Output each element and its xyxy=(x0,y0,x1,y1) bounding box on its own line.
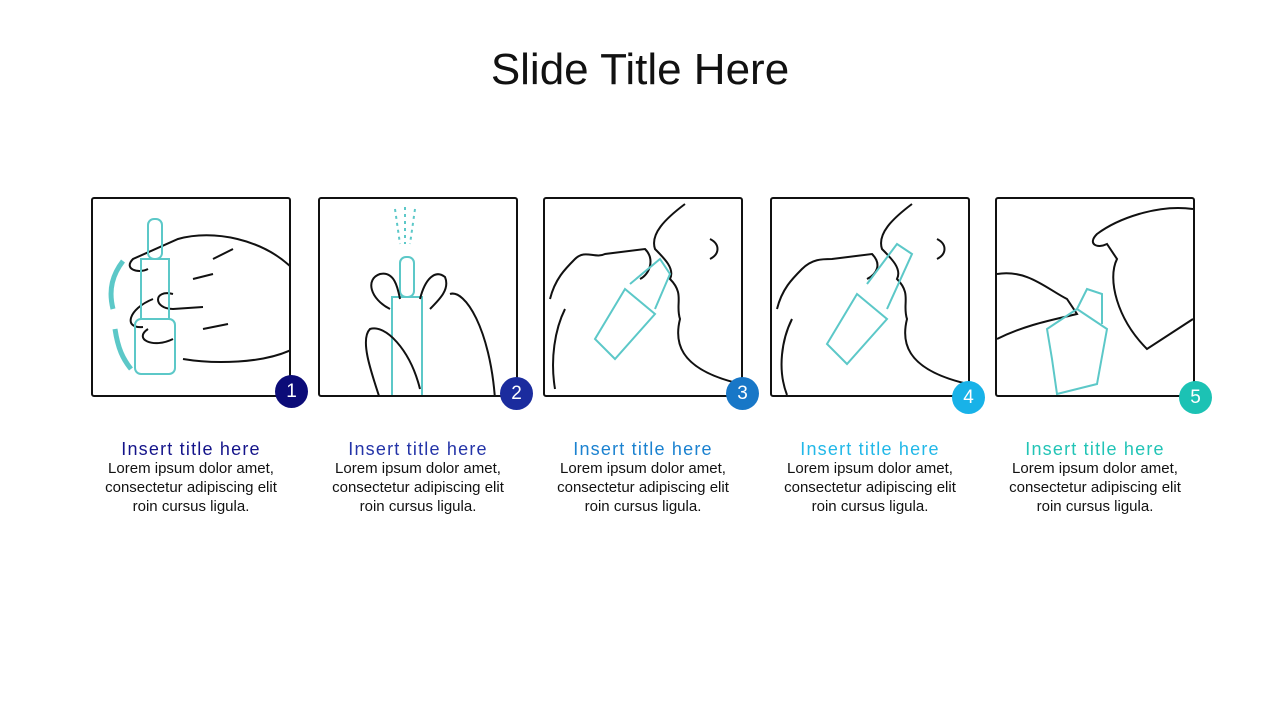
text 3: Lorem ipsum dolor amet, xyxy=(560,460,726,477)
text 1: Insert title here xyxy=(121,439,261,459)
text 2: roin cursus ligula. xyxy=(360,498,476,515)
panel: step 2 xyxy=(318,197,533,515)
text 4: roin cursus ligula. xyxy=(812,498,928,515)
text 3: Insert title here xyxy=(573,439,713,459)
text 1: consectetur adipiscing elit xyxy=(105,479,277,496)
text 5: Lorem ipsum dolor amet, xyxy=(1012,460,1178,477)
text 3 xyxy=(557,439,729,515)
illustration 4 xyxy=(770,197,970,397)
badge 2 xyxy=(500,377,533,410)
text 3: consectetur adipiscing elit xyxy=(557,479,729,496)
text 2: Insert title here xyxy=(348,439,488,459)
badge 4 xyxy=(952,381,985,414)
title: Slide Title Here xyxy=(491,45,789,94)
badge 2: 2 xyxy=(511,383,522,404)
badge 5: 5 xyxy=(1190,387,1201,408)
panel: step 3 xyxy=(543,197,759,515)
text 5: roin cursus ligula. xyxy=(1037,498,1153,515)
panel: step 4 xyxy=(770,197,985,515)
badge 1 xyxy=(275,375,308,408)
panel: step 1 xyxy=(91,197,308,515)
text 4: Lorem ipsum dolor amet, xyxy=(787,460,953,477)
illustration 2 xyxy=(318,197,518,397)
text 5: consectetur adipiscing elit xyxy=(1009,479,1181,496)
text 1: roin cursus ligula. xyxy=(133,498,249,515)
text 2: consectetur adipiscing elit xyxy=(332,479,504,496)
text 3: roin cursus ligula. xyxy=(585,498,701,515)
badge 5 xyxy=(1179,381,1212,414)
text 2: Lorem ipsum dolor amet, xyxy=(335,460,501,477)
illustration 5 xyxy=(995,197,1195,397)
badge 3: 3 xyxy=(737,383,748,404)
text 4 xyxy=(784,439,956,515)
text 1: Lorem ipsum dolor amet, xyxy=(108,460,274,477)
illustration 1 xyxy=(91,197,291,397)
badge 1: 1 xyxy=(286,381,297,402)
text 4: consectetur adipiscing elit xyxy=(784,479,956,496)
badge 4: 4 xyxy=(963,387,974,408)
badge 3 xyxy=(726,377,759,410)
text 5 xyxy=(1009,439,1181,515)
text 2 xyxy=(332,439,504,515)
panel: step 5 xyxy=(995,197,1212,515)
text 4: Insert title here xyxy=(800,439,940,459)
text 1 xyxy=(105,439,277,515)
illustration 3 xyxy=(543,197,743,397)
text 5: Insert title here xyxy=(1025,439,1165,459)
